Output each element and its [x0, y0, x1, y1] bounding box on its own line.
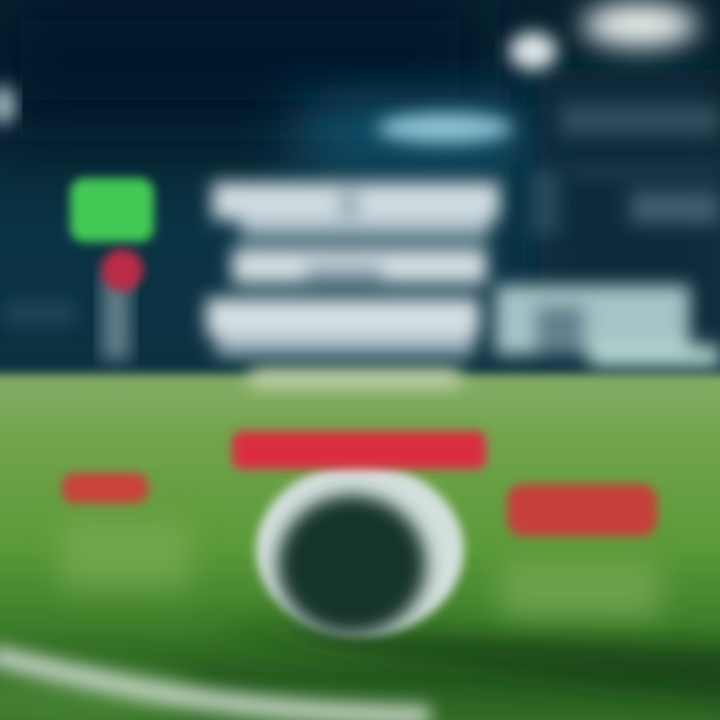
left red label: [62, 473, 148, 503]
red circle: [101, 249, 143, 291]
left faint caption: [5, 300, 75, 326]
grass field: [0, 368, 720, 720]
stadium lights: [0, 3, 698, 143]
headline blurred text block: [206, 182, 500, 356]
stands on the right: [530, 105, 720, 235]
field line: [0, 655, 430, 716]
green panel: [70, 178, 154, 242]
red banner: [232, 431, 486, 469]
soccer ball: [256, 464, 464, 636]
right red label: [507, 484, 657, 536]
white structure right of the headline: [495, 285, 720, 367]
signal post: [5, 275, 130, 360]
stadium background: [0, 0, 720, 385]
